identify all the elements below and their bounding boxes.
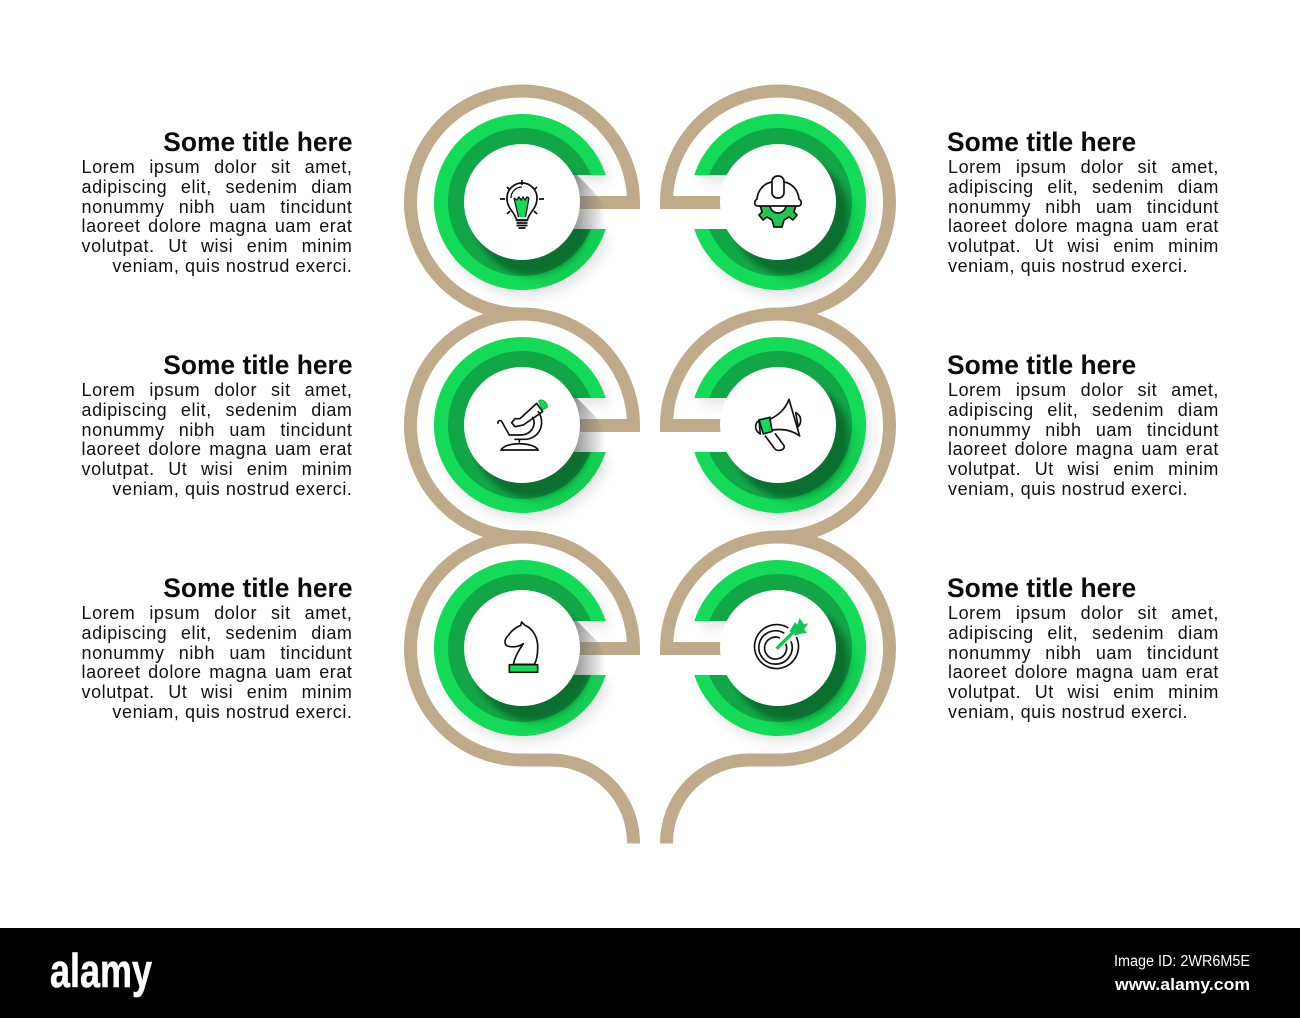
- text block: left bottom: Lorem ipsum dolor sit amet,: [82, 603, 352, 623]
- icon: megaphone: [756, 399, 801, 450]
- footer logo: alamy: [50, 944, 152, 997]
- text block: left bottom: nonummy nibh uam tincidunt: [82, 643, 352, 663]
- text block: right top: nonummy nibh uam tincidunt: [948, 197, 1219, 217]
- step 2: green ring with helmet icon: [694, 114, 871, 297]
- text block: right middle: nonummy nibh uam tincidunt: [948, 420, 1219, 440]
- footer bar: [0, 928, 1300, 1018]
- text block: right middle: laoreet dolore magna uam erat: [948, 439, 1219, 459]
- text block: left bottom: adipiscing elit, sedenim diam: [82, 623, 352, 643]
- step 1: green ring with bulb icon: [434, 114, 611, 297]
- footer image id: Image ID: 2WR6M5E: [1114, 953, 1250, 970]
- text block: left middle: volutpat. Ut wisi enim minim: [82, 459, 352, 479]
- text block: left top: volutpat. Ut wisi enim minim: [82, 236, 352, 256]
- text block: left middle: Some title here: [163, 350, 352, 380]
- tan outline: left column: [410, 91, 634, 844]
- step 4: green ring with megaphone icon: [694, 337, 871, 520]
- text block: right middle: veniam, quis nostrud exerci.: [948, 479, 1188, 499]
- text block: left middle: adipiscing elit, sedenim diam: [82, 400, 352, 420]
- icon: microscope: [498, 400, 547, 450]
- step 3: green ring with microscope icon: [434, 337, 611, 520]
- text block: right top: Some title here: [947, 127, 1136, 157]
- text block: left bottom: Some title here: [163, 573, 352, 603]
- icon: target and arrow: [755, 619, 808, 669]
- text block: left top: Some title here: [163, 127, 352, 157]
- text block: left top: laoreet dolore magna uam erat: [82, 216, 352, 236]
- text block: right middle: Lorem ipsum dolor sit amet,: [948, 380, 1219, 400]
- step 5: green ring with chess knight icon: [434, 560, 611, 743]
- text block: left middle: nonummy nibh uam tincidunt: [82, 420, 352, 440]
- text block: left bottom: volutpat. Ut wisi enim minim: [82, 682, 352, 702]
- footer url: www.alamy.com: [1114, 975, 1250, 994]
- text block: right bottom: [947, 573, 1219, 722]
- text block: right top: [947, 127, 1219, 276]
- icon: light bulb: [500, 180, 544, 228]
- text block: right bottom: Lorem ipsum dolor sit amet,: [948, 603, 1219, 623]
- text block: left top: adipiscing elit, sedenim diam: [82, 177, 352, 197]
- text block: right middle: Some title here: [947, 350, 1136, 380]
- text block: left middle: veniam, quis nostrud exerci.: [112, 479, 352, 499]
- text block: right middle: adipiscing elit, sedenim diam: [948, 400, 1219, 420]
- text block: right top: Lorem ipsum dolor sit amet,: [948, 157, 1219, 177]
- text block: right middle: [947, 350, 1219, 499]
- icon: chess knight: [505, 622, 538, 672]
- text block: left top: [82, 127, 352, 276]
- text block: right bottom: adipiscing elit, sedenim diam: [948, 623, 1219, 643]
- text block: left bottom: veniam, quis nostrud exerci.: [112, 702, 352, 722]
- step 6: green ring with target icon: [694, 560, 871, 743]
- icon: helmet and gear: [755, 176, 801, 227]
- text block: right bottom: laoreet dolore magna uam erat: [948, 662, 1219, 682]
- text block: left middle: Lorem ipsum dolor sit amet,: [82, 380, 352, 400]
- text block: right bottom: volutpat. Ut wisi enim minim: [948, 682, 1219, 702]
- text block: right bottom: veniam, quis nostrud exerci.: [948, 702, 1188, 722]
- text block: left bottom: [82, 573, 352, 722]
- text block: right top: adipiscing elit, sedenim diam: [948, 177, 1219, 197]
- text block: left middle: laoreet dolore magna uam erat: [82, 439, 352, 459]
- text block: right middle: volutpat. Ut wisi enim minim: [948, 459, 1219, 479]
- text block: left bottom: laoreet dolore magna uam erat: [82, 662, 352, 682]
- text block: left top: veniam, quis nostrud exerci.: [112, 256, 352, 276]
- text block: right bottom: Some title here: [947, 573, 1136, 603]
- text block: right top: volutpat. Ut wisi enim minim: [948, 236, 1219, 256]
- text block: left middle: [82, 350, 352, 499]
- text block: right bottom: nonummy nibh uam tincidunt: [948, 643, 1219, 663]
- text block: right top: laoreet dolore magna uam erat: [948, 216, 1219, 236]
- text block: right top: veniam, quis nostrud exerci.: [948, 256, 1188, 276]
- tan outline: right column: [666, 91, 890, 844]
- text block: left top: nonummy nibh uam tincidunt: [82, 197, 352, 217]
- text block: left top: Lorem ipsum dolor sit amet,: [82, 157, 352, 177]
